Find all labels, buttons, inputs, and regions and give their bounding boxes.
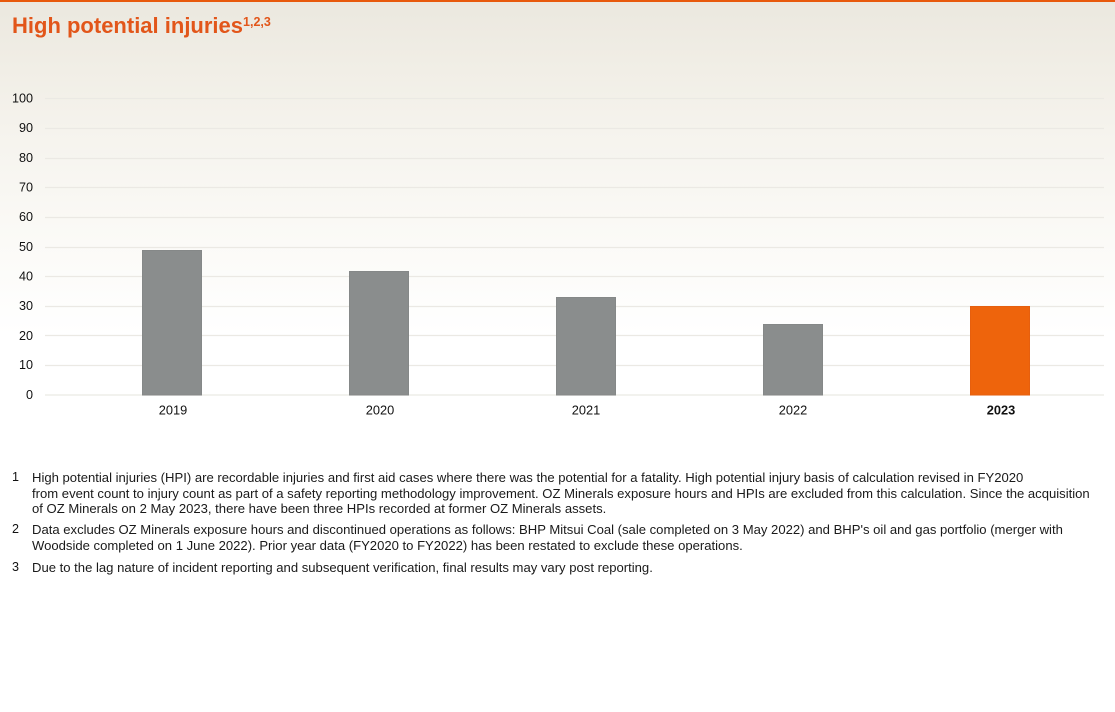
y axis labels: 30 (19, 299, 33, 313)
footnote 3: 3 (12, 560, 19, 574)
bar 2023 (970, 306, 1030, 395)
footnote 2: 2 (12, 522, 19, 536)
y axis labels: 10 (19, 358, 33, 372)
y axis labels: 20 (19, 329, 33, 343)
bar 2022 (764, 324, 822, 395)
footnote 2 (12, 522, 1063, 553)
x axis labels: 2020 (366, 402, 394, 418)
x axis labels: 2021 (572, 402, 600, 418)
bar 2019 (142, 250, 202, 395)
footnote 1: 1 (12, 470, 19, 484)
x axis labels (159, 402, 1015, 418)
bar 2020 (350, 272, 408, 395)
x axis labels: 2022 (779, 402, 807, 418)
footnote 2: Woodside completed on 1 June 2022). Prior year data (FY2020 to FY2022) has been restated to exclude these operations. (32, 538, 743, 553)
y axis labels: 70 (19, 180, 33, 194)
bar 2021 (556, 298, 616, 395)
y axis labels (12, 92, 33, 402)
y axis labels: 80 (19, 151, 33, 165)
x axis labels: 2019 (159, 402, 187, 418)
footnote 1: from event count to injury count as part of a safety reporting methodology improvement. OZ Minerals exposure hours and HPIs are excluded from this calculation. Since the acquisition (32, 486, 1090, 500)
footnote 1: High potential injuries (HPI) are recordable injuries and first aid cases where there was the potential for a fatality. High potential injury basis of calculation revised in FY2020 (32, 470, 1023, 485)
title: High potential injuries1,2,3 (12, 13, 271, 38)
y axis labels: 60 (19, 210, 33, 224)
y axis labels: 90 (19, 121, 33, 135)
y axis labels: 0 (26, 388, 33, 402)
footnote 1 (12, 470, 1090, 516)
footnote 1: of OZ Minerals on 2 May 2023, there have been three HPIs recorded at former OZ Minerals assets. (32, 501, 606, 516)
footnote 2: Data excludes OZ Minerals exposure hours and discontinued operations as follows: BHP Mitsui Coal (sale completed on 3 May 2022) and BHP's oil and gas portfolio (merger with (32, 522, 1063, 537)
footnotes (12, 470, 1090, 575)
y axis labels: 50 (19, 240, 33, 254)
x axis labels: 2023 (987, 402, 1015, 418)
footnote 3: Due to the lag nature of incident reporting and subsequent verification, final results may vary post reporting. (32, 560, 653, 575)
y axis labels: 100 (12, 92, 33, 106)
y axis labels: 40 (19, 270, 33, 284)
bar chart (12, 92, 1104, 418)
